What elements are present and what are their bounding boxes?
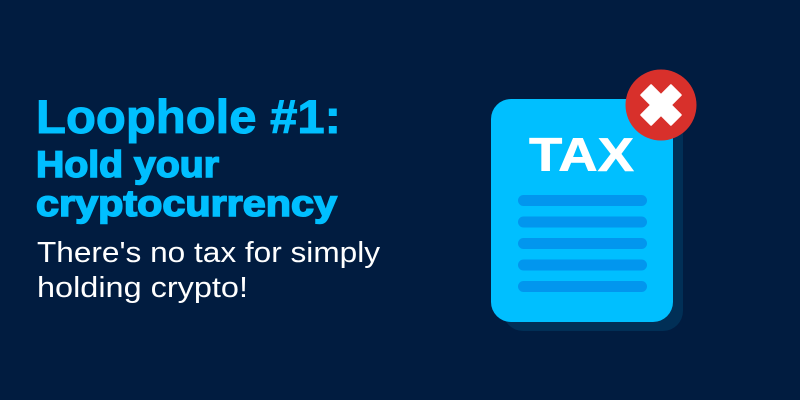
document label: TAX: TAX — [529, 128, 634, 181]
body line 2: holding crypto! — [37, 272, 248, 304]
heading line: Hold your: Hold your — [36, 144, 219, 185]
body line 1: There's no tax for simply — [37, 237, 381, 269]
body text — [37, 237, 381, 304]
document shadow — [503, 110, 683, 331]
red circle badge with white cross — [626, 70, 696, 140]
document page — [491, 99, 673, 322]
document text lines — [518, 195, 647, 292]
heading line: cryptocurrency: cryptocurrency — [36, 183, 337, 224]
heading line: Loophole #1: Loophole #1: — [36, 90, 341, 143]
heading: Loophole #1 and subtitle — [36, 90, 341, 224]
icon: tax document with red cross — [491, 70, 696, 331]
